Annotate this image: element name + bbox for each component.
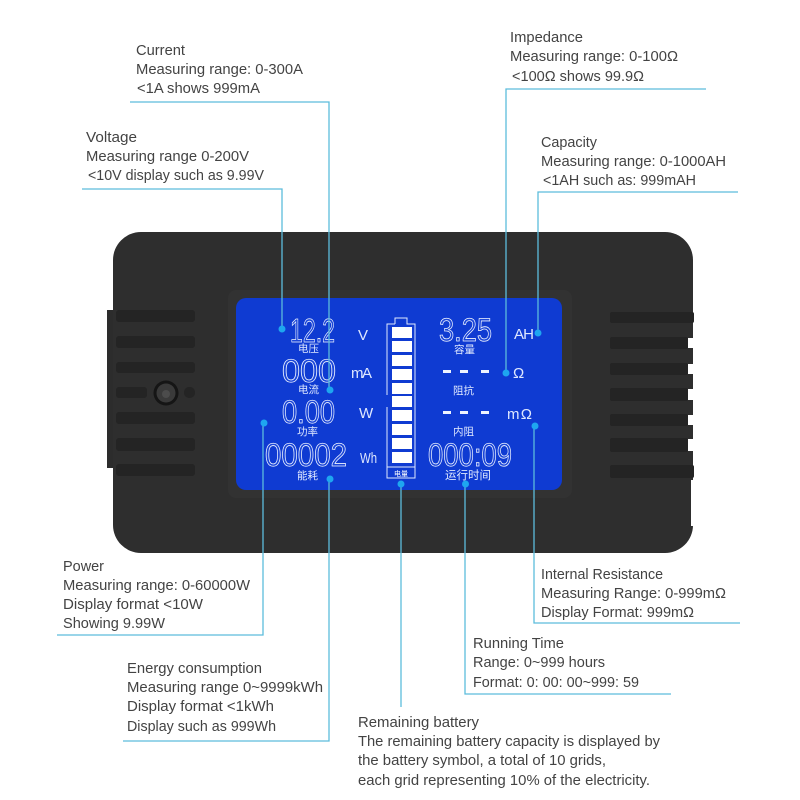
callout: power: Measuring range: 0-60000W	[63, 578, 250, 594]
callout: energy consumption: Energy consumption	[127, 661, 262, 677]
battery gauge	[387, 318, 415, 478]
callout: voltage: <10V display such as 9.99V	[88, 168, 264, 184]
callout: impedance: <100Ω shows 99.9Ω	[512, 69, 644, 85]
running time reading: 运行时间	[445, 469, 491, 482]
power reading	[282, 394, 374, 438]
impedance reading: Ω	[513, 365, 524, 382]
capacity reading: 容量	[454, 343, 475, 356]
meter body	[107, 232, 694, 553]
power reading: 功率	[297, 425, 318, 438]
voltage reading: 12.2	[290, 312, 335, 349]
current reading: 电流	[298, 383, 319, 396]
left vent slots	[116, 310, 195, 476]
right edge notches	[688, 338, 694, 526]
callout: running time	[462, 480, 671, 694]
callout: capacity: Measuring range: 0-1000AH	[541, 154, 726, 170]
callout: remaining battery: each grid representing 10% of the electricity.	[358, 773, 650, 789]
impedance reading: 阻抗	[453, 384, 474, 397]
energy reading: 00002	[265, 437, 347, 473]
callout: energy consumption: Measuring range 0~9999kWh	[127, 680, 323, 696]
callout: voltage	[82, 130, 286, 332]
callout: power: Showing 9.99W	[63, 616, 165, 632]
capacity reading: 3.25	[439, 312, 492, 348]
callout: capacity: <1AH such as: 999mAH	[543, 173, 696, 189]
voltage reading: 电压	[298, 342, 319, 355]
callout: voltage: Measuring range 0-200V	[86, 149, 249, 165]
internal resistance reading	[443, 406, 532, 438]
callout: remaining battery: The remaining battery capacity is displayed by	[358, 734, 661, 750]
callout: voltage: Voltage	[86, 130, 137, 146]
icon: push button	[154, 380, 178, 406]
callout: impedance	[502, 30, 706, 376]
callout: energy consumption: Display such as 999Wh	[127, 719, 276, 735]
internal resistance reading: 内阻	[453, 425, 474, 438]
callout: capacity	[534, 135, 738, 336]
current reading: mA	[351, 365, 372, 382]
callout: capacity: Capacity	[541, 135, 598, 151]
callout: current: <1A shows 999mA	[137, 81, 260, 97]
callout: running time: Range: 0~999 hours	[473, 655, 605, 671]
current reading	[282, 353, 372, 396]
callout: power: Power	[63, 559, 104, 575]
callout: power	[57, 420, 268, 635]
internal resistance reading: mΩ	[507, 406, 532, 423]
capacity reading	[439, 312, 534, 356]
callout: internal resistance	[532, 422, 740, 623]
callout: current: Measuring range: 0-300A	[136, 62, 303, 78]
callout: running time: Running Time	[473, 636, 564, 652]
LCD screen	[236, 298, 562, 490]
callout: remaining battery: the battery symbol, a total of 10 grids,	[358, 753, 606, 769]
callout: energy consumption: Display format <1kWh	[127, 699, 274, 715]
energy reading	[265, 437, 377, 482]
callout: internal resistance: Internal Resistance	[541, 567, 663, 583]
current reading: 000	[282, 353, 336, 389]
callout: internal resistance: Display Format: 999mΩ	[541, 605, 694, 621]
power reading: W	[359, 405, 374, 422]
battery gauge: 电量	[394, 469, 408, 478]
callout: energy consumption	[123, 476, 334, 741]
voltage reading: V	[358, 327, 368, 344]
callout: internal resistance: Measuring Range: 0-999mΩ	[541, 586, 726, 602]
running time reading: 000:09	[428, 437, 512, 473]
callout: remaining battery	[358, 480, 661, 789]
callout: current	[130, 43, 334, 394]
callout: impedance: Impedance	[510, 30, 583, 46]
impedance reading	[443, 365, 524, 397]
energy reading: 能耗	[297, 469, 318, 482]
right vent slots	[610, 312, 694, 478]
callout: current: Current	[136, 43, 185, 59]
callout: remaining battery: Remaining battery	[358, 715, 480, 731]
callout: running time: Format: 0: 00: 00~999: 59	[473, 675, 639, 691]
callout: power: Display format <10W	[63, 597, 203, 613]
callout: impedance: Measuring range: 0-100Ω	[510, 49, 678, 65]
energy reading: Wh	[360, 450, 377, 467]
power reading: 0.00	[282, 394, 335, 430]
capacity reading: AH	[514, 326, 534, 343]
